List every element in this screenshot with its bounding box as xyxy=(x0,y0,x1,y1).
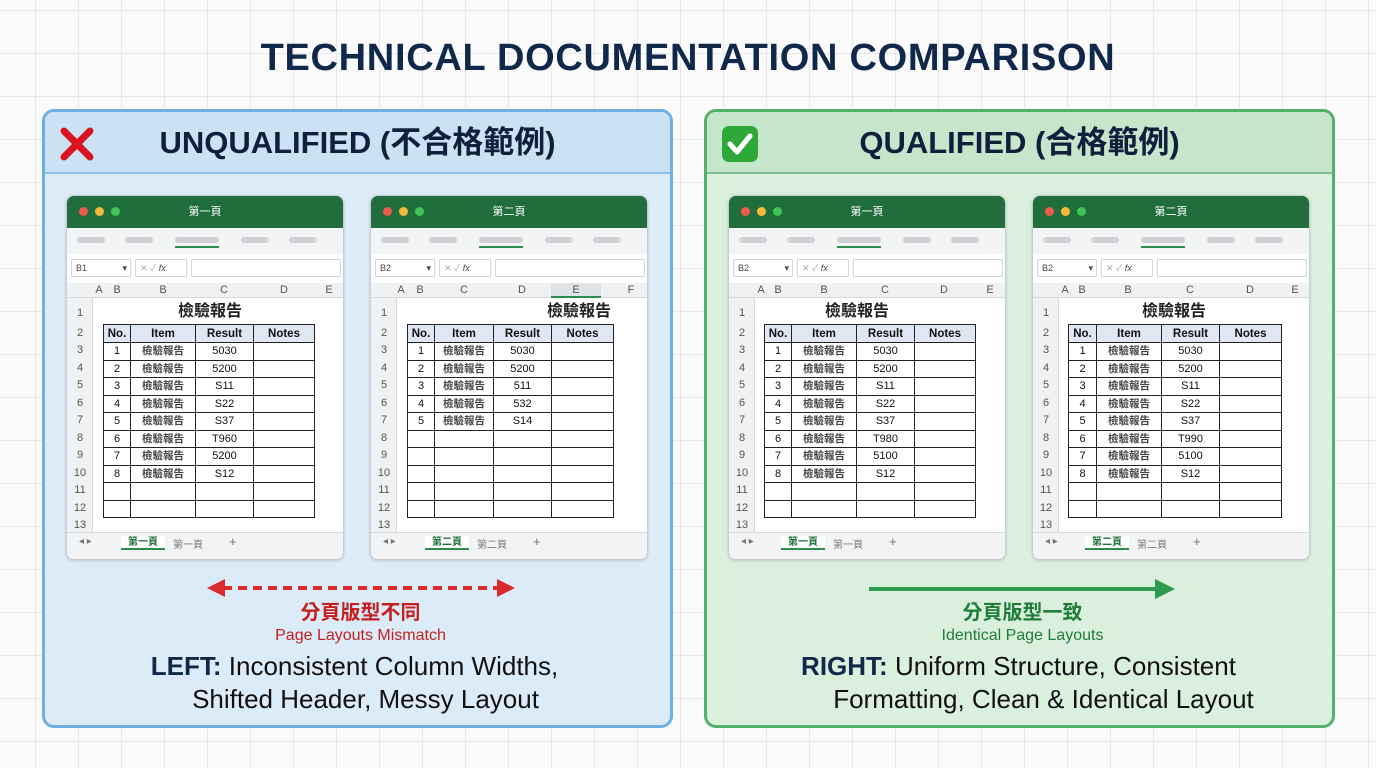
spreadsheet: right page 1: 檢驗報告 xyxy=(803,380,845,392)
spreadsheet: left page 2: 532 xyxy=(513,398,532,410)
spreadsheet: left page 2: 9 xyxy=(381,449,387,461)
spreadsheet: right page 1: Notes xyxy=(929,328,961,340)
spreadsheet: right page 1: 8 xyxy=(775,468,781,480)
spreadsheet: left page 1: 3 xyxy=(114,380,120,392)
spreadsheet: left page 2: Notes xyxy=(567,328,598,340)
spreadsheet: right page 2: 8 xyxy=(1079,468,1086,480)
spreadsheet: right page 1: 7 xyxy=(775,450,781,462)
spreadsheet: right page 2: 8 xyxy=(1043,432,1049,444)
spreadsheet: left page 1: 檢驗報告 xyxy=(142,380,184,392)
spreadsheet: right page 2: 6 xyxy=(1043,397,1049,409)
spreadsheet: right page 2: D xyxy=(1246,284,1254,296)
spreadsheet: right page 1: 1 xyxy=(775,345,781,357)
spreadsheet: right page 2: 5 xyxy=(1079,415,1086,427)
spreadsheet: left page 2: E xyxy=(572,284,580,296)
spreadsheet: left page 1: 13 xyxy=(74,519,86,531)
spreadsheet: right page 2: 2 xyxy=(1043,327,1049,339)
spreadsheet: right page 2: 第二頁 xyxy=(1137,540,1167,551)
spreadsheet: left page 1: 8 xyxy=(114,468,120,480)
spreadsheet: left page 2: 13 xyxy=(378,519,390,531)
spreadsheet: right page 1: 檢驗報告 xyxy=(825,303,889,320)
spreadsheet: left page 1: 5030 xyxy=(212,345,237,357)
spreadsheet: right page 1: 6 xyxy=(739,397,745,409)
spreadsheet: left page 2: 3 xyxy=(418,380,424,392)
spreadsheet: right page 1: 6 xyxy=(775,433,781,445)
spreadsheet: left page 1: ✕ ✓ fx xyxy=(140,263,166,273)
spreadsheet: left page 1: 5200 xyxy=(212,363,237,375)
spreadsheet: right page 1: 第一頁 xyxy=(833,540,863,551)
spreadsheet: right page 1: A xyxy=(757,284,765,296)
spreadsheet: left page 1: 9 xyxy=(77,449,83,461)
spreadsheet: left page 1: S11 xyxy=(215,380,234,392)
spreadsheet: right page 2: 4 xyxy=(1043,362,1049,374)
spreadsheet: left page 2: 第二頁 xyxy=(492,206,526,218)
spreadsheet: left page 2: C xyxy=(460,284,468,296)
spreadsheet: right page 2: ✕ ✓ fx xyxy=(1106,263,1132,273)
caption: identical xyxy=(942,602,1103,644)
heading: unqualified: UNQUALIFIED (不合格範例) xyxy=(159,125,556,160)
spreadsheet: right page 1: 2 xyxy=(775,363,781,375)
spreadsheet: right page 2: S37 xyxy=(1181,415,1200,427)
spreadsheet: right page 2: ▾ xyxy=(1088,263,1093,273)
spreadsheet: left page 1: 6 xyxy=(77,397,83,409)
text: right description: Formatting, Clean & Identical Layout xyxy=(833,684,1254,714)
spreadsheet: right page 2: 5200 xyxy=(1178,363,1203,375)
spreadsheet: right page 1: B xyxy=(774,284,782,296)
spreadsheet: right page 2: 檢驗報告 xyxy=(1108,450,1150,462)
spreadsheet: left page 2: S14 xyxy=(513,415,532,427)
spreadsheet: left page 1: 7 xyxy=(114,450,120,462)
panel: qualified xyxy=(704,109,1335,728)
caption: mismatch xyxy=(275,602,446,644)
spreadsheet: right page 1 xyxy=(728,195,1006,560)
spreadsheet: left page 2: 7 xyxy=(381,414,387,426)
spreadsheet: left page 1: 5200 xyxy=(212,450,237,462)
spreadsheet: left page 2: 5200 xyxy=(510,363,535,375)
spreadsheet: left page 1: Result xyxy=(207,328,242,340)
spreadsheet: right page 1: 5 xyxy=(775,415,781,427)
spreadsheet: right page 1: S12 xyxy=(876,468,895,480)
spreadsheet: left page 1: ◂ ▸ xyxy=(79,536,92,547)
spreadsheet: right page 1: 8 xyxy=(739,432,745,444)
icon: red x xyxy=(60,128,94,160)
spreadsheet: left page 2: Result xyxy=(505,328,540,340)
arrow: dashed double xyxy=(207,579,515,597)
spreadsheet: right page 1: ◂ ▸ xyxy=(741,536,754,547)
spreadsheet: left page 1: 10 xyxy=(74,467,86,479)
spreadsheet: right page 2: 5 xyxy=(1043,379,1049,391)
spreadsheet: left page 1: 5 xyxy=(114,415,120,427)
text: left description xyxy=(151,651,558,714)
spreadsheet: left page 1: No. xyxy=(108,328,126,340)
spreadsheet: right page 2: Result xyxy=(1173,328,1208,340)
spreadsheet: right page 2: 檢驗報告 xyxy=(1108,433,1150,445)
spreadsheet: left page 1: 2 xyxy=(77,327,83,339)
spreadsheet: right page 2: C xyxy=(1186,284,1194,296)
spreadsheet: left page 1: 檢驗報告 xyxy=(142,415,184,427)
spreadsheet: left page 1: C xyxy=(220,284,228,296)
spreadsheet: left page 1: 4 xyxy=(77,362,83,374)
spreadsheet: right page 2: 第二頁 xyxy=(1154,206,1188,218)
spreadsheet: left page 2: 第二頁 xyxy=(432,537,462,548)
spreadsheet: left page 2: 6 xyxy=(381,397,387,409)
spreadsheet: left page 2: + xyxy=(533,534,541,549)
heading: qualified xyxy=(707,112,1332,174)
arrow: solid right xyxy=(869,579,1175,599)
spreadsheet: right page 2: Item xyxy=(1117,328,1141,340)
spreadsheet: left page 1: B xyxy=(159,284,167,296)
spreadsheet: right page 1: 第一頁 xyxy=(850,206,884,218)
spreadsheet: right page 2: E xyxy=(1291,284,1299,296)
caption: identical: 分頁版型一致 xyxy=(962,602,1082,624)
spreadsheet: left page 2: 1 xyxy=(418,345,424,357)
spreadsheet: left page 2: B xyxy=(416,284,424,296)
spreadsheet: right page 2: S22 xyxy=(1181,398,1200,410)
spreadsheet: right page 2: 檢驗報告 xyxy=(1108,380,1150,392)
spreadsheet: right page 2: B xyxy=(1078,284,1086,296)
spreadsheet: left page 2: 11 xyxy=(378,484,390,496)
spreadsheet: left page 2: D xyxy=(518,284,526,296)
spreadsheet: left page 1: D xyxy=(280,284,288,296)
spreadsheet: right page 2: B2 xyxy=(1042,263,1053,273)
spreadsheet: right page 1: 5 xyxy=(739,379,745,391)
spreadsheet: right page 1: Item xyxy=(812,328,836,340)
spreadsheet: left page 2: 檢驗報告 xyxy=(443,345,485,357)
spreadsheet: left page 1: 檢驗報告 xyxy=(142,363,184,375)
spreadsheet: left page 1: 11 xyxy=(74,484,86,496)
spreadsheet: right page 1: 4 xyxy=(775,398,781,410)
spreadsheet: right page 2: T990 xyxy=(1178,433,1203,445)
spreadsheet: right page 2: 檢驗報告 xyxy=(1142,303,1206,320)
spreadsheet: right page 2: 13 xyxy=(1040,519,1052,531)
spreadsheet: right page 1: 11 xyxy=(736,484,748,496)
text: left description: Shifted Header, Messy Layout xyxy=(192,684,539,714)
spreadsheet: right page 2: 10 xyxy=(1040,467,1052,479)
spreadsheet: right page 1: 1 xyxy=(739,307,745,319)
spreadsheet: right page 2: No. xyxy=(1073,328,1092,340)
spreadsheet: right page 2: 7 xyxy=(1043,414,1049,426)
spreadsheet: left page 1: 檢驗報告 xyxy=(142,433,184,445)
spreadsheet: left page 2: 511 xyxy=(514,380,531,392)
spreadsheet: left page 2: 5 xyxy=(381,379,387,391)
spreadsheet: left page 1: S22 xyxy=(215,398,234,410)
spreadsheet: right page 2: S12 xyxy=(1181,468,1200,480)
spreadsheet: left page 1: Notes xyxy=(268,328,300,340)
spreadsheet: left page 2: A xyxy=(397,284,405,296)
spreadsheet: right page 1: 檢驗報告 xyxy=(803,415,845,427)
spreadsheet: left page 2: Item xyxy=(452,328,476,340)
spreadsheet: right page 1: C xyxy=(881,284,889,296)
spreadsheet: right page 1: 檢驗報告 xyxy=(803,433,845,445)
spreadsheet: left page 1: T960 xyxy=(212,433,237,445)
spreadsheet: right page 1: No. xyxy=(769,328,787,340)
spreadsheet: right page 2: 1 xyxy=(1079,345,1086,357)
spreadsheet: left page 2: ◂ ▸ xyxy=(383,536,396,547)
spreadsheet: right page 1: B2 xyxy=(738,263,749,273)
caption: mismatch: 分頁版型不同 xyxy=(300,602,420,624)
spreadsheet: left page 2 xyxy=(370,195,648,560)
spreadsheet: left page 2: 2 xyxy=(381,327,387,339)
spreadsheet: right page 1: ✕ ✓ fx xyxy=(802,263,828,273)
spreadsheet: left page 1: 8 xyxy=(77,432,83,444)
spreadsheet: left page 1: 第一頁 xyxy=(128,537,158,548)
spreadsheet: right page 2: 檢驗報告 xyxy=(1108,398,1150,410)
spreadsheet: right page 1: 2 xyxy=(739,327,745,339)
spreadsheet: left page 2: 5030 xyxy=(510,345,535,357)
spreadsheet: left page 1: 6 xyxy=(114,433,120,445)
spreadsheet: right page 2: 6 xyxy=(1079,433,1086,445)
spreadsheet: left page 2: 檢驗報告 xyxy=(443,415,485,427)
spreadsheet: right page 1: 檢驗報告 xyxy=(803,450,845,462)
text: right description xyxy=(801,651,1254,714)
spreadsheet: right page 2: 第二頁 xyxy=(1092,537,1122,548)
spreadsheet: right page 2: A xyxy=(1061,284,1069,296)
spreadsheet: left page 2: 1 xyxy=(381,307,387,319)
spreadsheet: left page 1: 第一頁 xyxy=(173,540,203,551)
spreadsheet: left page 1: 檢驗報告 xyxy=(142,450,184,462)
spreadsheet: right page 1: 檢驗報告 xyxy=(803,398,845,410)
spreadsheet: right page 1: E xyxy=(986,284,994,296)
spreadsheet: left page 2: No. xyxy=(412,328,430,340)
spreadsheet: left page 1: 檢驗報告 xyxy=(142,345,184,357)
spreadsheet: right page 2: 5100 xyxy=(1178,450,1203,462)
spreadsheet: right page 2: 3 xyxy=(1043,344,1049,356)
caption: mismatch: Page Layouts Mismatch xyxy=(275,627,446,644)
caption: identical: Identical Page Layouts xyxy=(942,627,1103,644)
heading: qualified: QUALIFIED (合格範例) xyxy=(859,125,1180,160)
spreadsheet: right page 2: 檢驗報告 xyxy=(1108,415,1150,427)
spreadsheet: right page 2: 檢驗報告 xyxy=(1108,468,1150,480)
spreadsheet: left page 1: 1 xyxy=(114,345,120,357)
spreadsheet: left page 1: 檢驗報告 xyxy=(142,468,184,480)
spreadsheet: left page 1: 3 xyxy=(77,344,83,356)
spreadsheet: right page 1: 10 xyxy=(736,467,748,479)
text: right description: RIGHT: Uniform Structure, Consistent xyxy=(801,651,1236,681)
spreadsheet: left page 2: 4 xyxy=(418,398,424,410)
spreadsheet: left page 1: 2 xyxy=(114,363,120,375)
spreadsheet: left page 2: 5 xyxy=(418,415,424,427)
spreadsheet: right page 2 xyxy=(1032,195,1310,560)
spreadsheet: left page 2: 8 xyxy=(381,432,387,444)
spreadsheet: right page 1: 9 xyxy=(739,449,745,461)
spreadsheet: left page 1: 4 xyxy=(114,398,120,410)
icon: green check xyxy=(722,126,758,162)
spreadsheet: right page 1: 檢驗報告 xyxy=(803,363,845,375)
spreadsheet: right page 2: 5030 xyxy=(1178,345,1203,357)
text: left description: LEFT: Inconsistent Column Widths, xyxy=(151,651,558,681)
spreadsheet: left page 2: 2 xyxy=(418,363,424,375)
spreadsheet: right page 1: 7 xyxy=(739,414,745,426)
spreadsheet: right page 2: S11 xyxy=(1181,380,1200,392)
spreadsheet: right page 1: 3 xyxy=(739,344,745,356)
spreadsheet: right page 1: ▾ xyxy=(784,263,789,273)
spreadsheet: right page 1: 4 xyxy=(739,362,745,374)
spreadsheet: right page 1: 第一頁 xyxy=(788,537,818,548)
spreadsheet: right page 1: 檢驗報告 xyxy=(803,345,845,357)
spreadsheet: left page 2: 3 xyxy=(381,344,387,356)
spreadsheet: left page 1: ▾ xyxy=(122,263,127,273)
spreadsheet: left page 2: 檢驗報告 xyxy=(547,303,611,320)
spreadsheet: right page 1: B xyxy=(820,284,828,296)
spreadsheet: left page 1 xyxy=(66,195,344,560)
spreadsheet: left page 2: F xyxy=(628,284,634,296)
spreadsheet: left page 1: 12 xyxy=(74,502,86,514)
title: TECHNICAL DOCUMENTATION COMPARISON xyxy=(261,37,1115,79)
spreadsheet: right page 1: 3 xyxy=(775,380,781,392)
spreadsheet: right page 1: S37 xyxy=(876,415,895,427)
spreadsheet: right page 1: 5100 xyxy=(873,450,898,462)
spreadsheet: left page 2: 10 xyxy=(378,467,390,479)
spreadsheet: right page 2: 2 xyxy=(1079,363,1086,375)
spreadsheet: right page 1: S11 xyxy=(876,380,895,392)
spreadsheet: right page 1: 5030 xyxy=(873,345,898,357)
spreadsheet: right page 1: 5200 xyxy=(873,363,898,375)
spreadsheet: left page 1: Item xyxy=(151,328,175,340)
spreadsheet: left page 2: 第二頁 xyxy=(477,540,507,551)
spreadsheet: right page 2: 1 xyxy=(1043,307,1049,319)
spreadsheet: right page 2: 11 xyxy=(1040,484,1052,496)
spreadsheet: right page 2: 檢驗報告 xyxy=(1108,363,1150,375)
spreadsheet: left page 1: B1 xyxy=(76,263,87,273)
spreadsheet: left page 1: 第一頁 xyxy=(188,206,222,218)
spreadsheet: right page 1: 檢驗報告 xyxy=(803,468,845,480)
spreadsheet: right page 2: ◂ ▸ xyxy=(1045,536,1058,547)
spreadsheet: left page 1: S12 xyxy=(215,468,234,480)
spreadsheet: left page 1: 7 xyxy=(77,414,83,426)
spreadsheet: right page 1: 12 xyxy=(736,502,748,514)
spreadsheet: left page 1: B xyxy=(113,284,121,296)
spreadsheet: left page 2: ▾ xyxy=(426,263,431,273)
spreadsheet: right page 1: S22 xyxy=(876,398,895,410)
spreadsheet: left page 2: 檢驗報告 xyxy=(443,363,485,375)
spreadsheet: left page 2: B2 xyxy=(380,263,391,273)
spreadsheet: left page 2: 檢驗報告 xyxy=(443,380,485,392)
spreadsheet: right page 2: 檢驗報告 xyxy=(1108,345,1150,357)
spreadsheet: left page 2: 4 xyxy=(381,362,387,374)
spreadsheet: left page 2: 12 xyxy=(378,502,390,514)
spreadsheet: right page 1: 13 xyxy=(736,519,748,531)
spreadsheet: left page 1: 檢驗報告 xyxy=(178,303,242,320)
spreadsheet: left page 1: 檢驗報告 xyxy=(142,398,184,410)
spreadsheet: left page 2: 檢驗報告 xyxy=(443,398,485,410)
spreadsheet: right page 2: 7 xyxy=(1079,450,1086,462)
spreadsheet: right page 2: 3 xyxy=(1079,380,1086,392)
panel: unqualified xyxy=(42,109,673,728)
spreadsheet: right page 1: D xyxy=(940,284,948,296)
spreadsheet: right page 2: 9 xyxy=(1043,449,1049,461)
spreadsheet: left page 1: A xyxy=(95,284,103,296)
spreadsheet: left page 1: S37 xyxy=(215,415,234,427)
spreadsheet: left page 1: E xyxy=(325,284,333,296)
spreadsheet: right page 2: 12 xyxy=(1040,502,1052,514)
spreadsheet: right page 1: T980 xyxy=(873,433,898,445)
spreadsheet: right page 1: Result xyxy=(868,328,903,340)
spreadsheet: right page 2: Notes xyxy=(1235,328,1266,340)
spreadsheet: right page 2: + xyxy=(1193,534,1201,549)
spreadsheet: right page 2: B xyxy=(1124,284,1132,296)
spreadsheet: left page 1: + xyxy=(229,534,237,549)
spreadsheet: left page 2: ✕ ✓ fx xyxy=(444,263,470,273)
spreadsheet: right page 2: 4 xyxy=(1079,398,1086,410)
spreadsheet: left page 1: 5 xyxy=(77,379,83,391)
spreadsheet: right page 1: + xyxy=(889,534,897,549)
spreadsheet: left page 1: 1 xyxy=(77,307,83,319)
heading: unqualified xyxy=(45,112,670,174)
